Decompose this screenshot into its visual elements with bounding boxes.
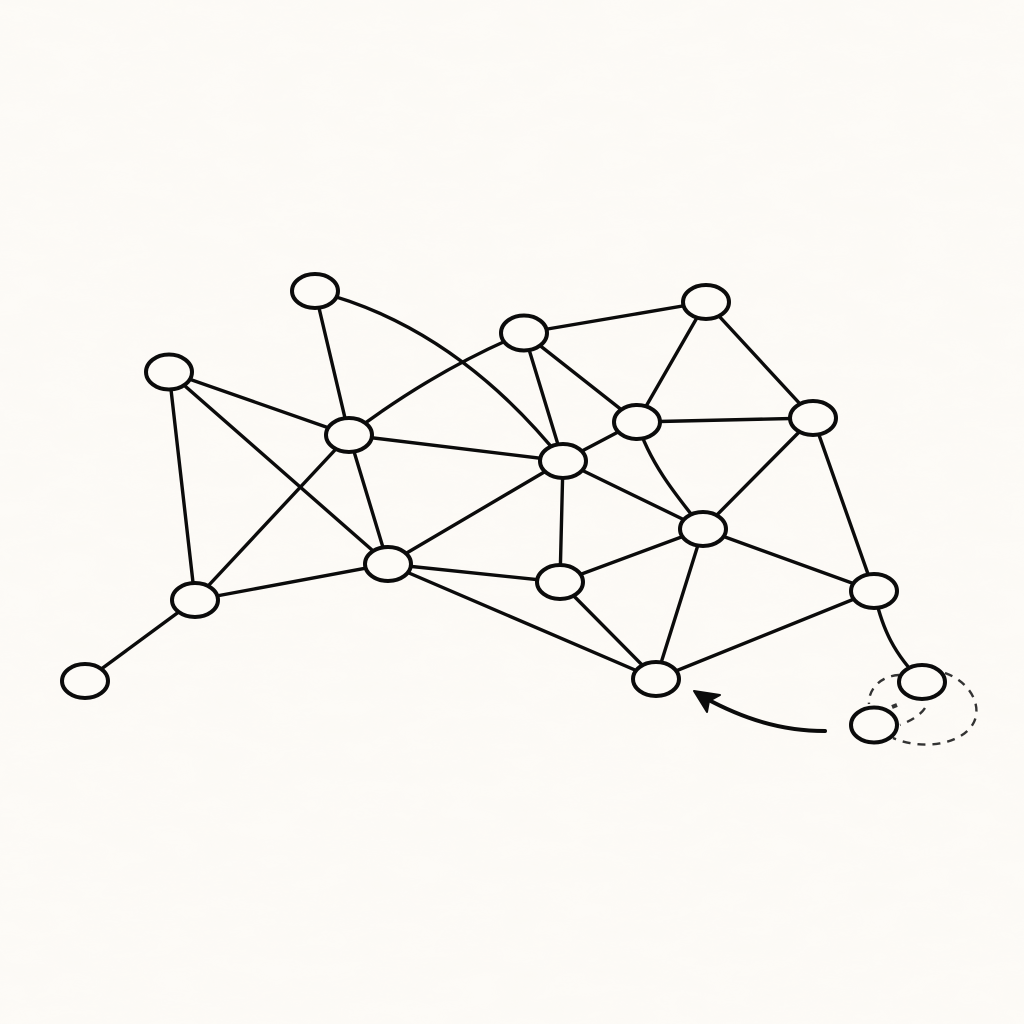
- network connections: [85, 291, 922, 682]
- network nodes: [62, 274, 945, 742]
- arrow pointing to node: [694, 691, 825, 731]
- dashed move trail: [869, 673, 976, 745]
